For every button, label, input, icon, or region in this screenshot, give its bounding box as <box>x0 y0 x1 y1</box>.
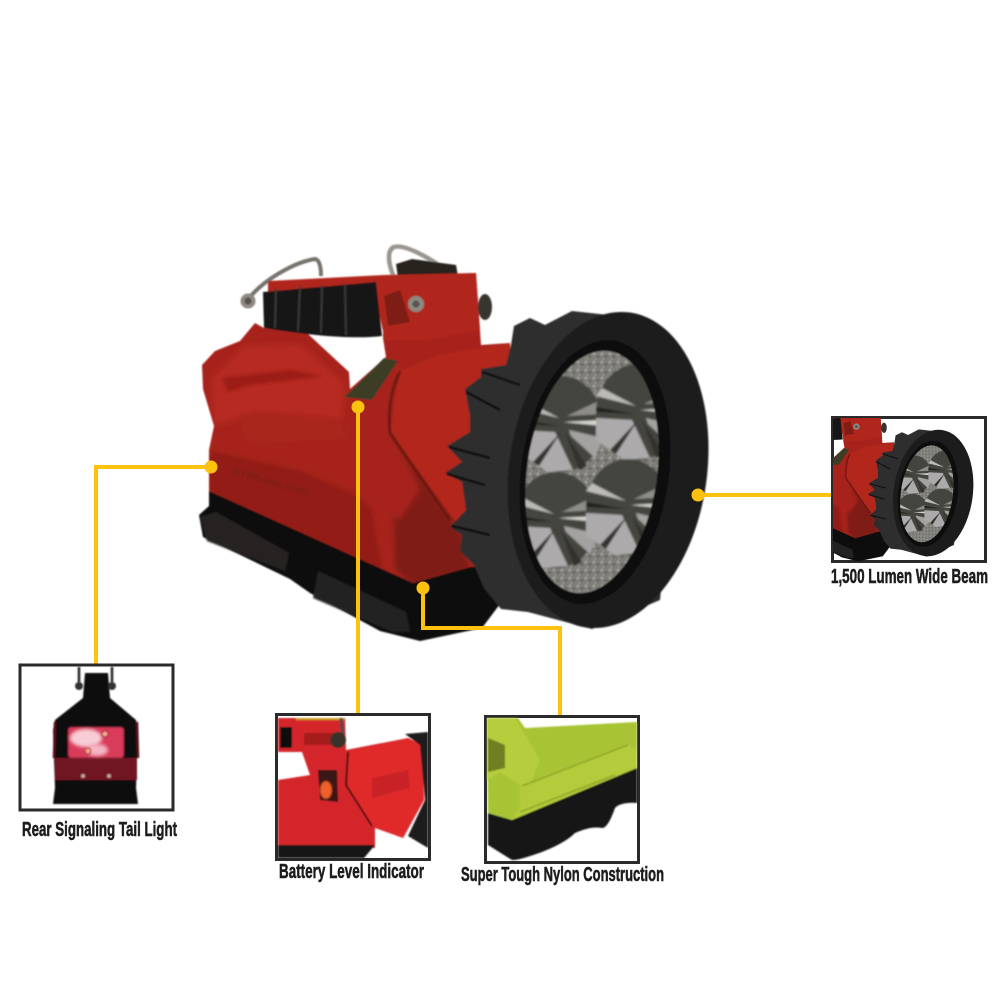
connector: battery indicator <box>352 400 364 713</box>
collar ribs <box>447 372 520 535</box>
connector: tail light <box>96 460 218 664</box>
icon: yellow-green housing close-up <box>487 718 637 860</box>
wire bails <box>247 247 447 304</box>
front bezel <box>488 299 728 641</box>
body shading: STREAMLIGHT <box>231 466 312 498</box>
label: battery level indicator: Battery Level Indicator <box>279 861 424 883</box>
callout: super tough nylon construction <box>486 716 638 862</box>
connector: wide beam <box>692 488 831 502</box>
icon: lantern side close-up <box>278 718 428 858</box>
rear black cap <box>396 259 458 278</box>
red lantern body <box>202 273 514 583</box>
label: rear signaling tail light: Rear Signaling Tail Light <box>22 819 177 841</box>
carry handle <box>263 273 480 340</box>
lens with four reflectors <box>510 340 680 610</box>
bolts <box>240 294 492 320</box>
callout: rear signaling tail light <box>20 665 173 810</box>
barrel seam <box>389 372 450 520</box>
connector: nylon construction <box>416 582 560 715</box>
inset frame <box>276 714 430 860</box>
body shading <box>209 345 470 585</box>
battery level indicator strip <box>344 358 398 400</box>
callout: battery level indicator <box>276 714 430 860</box>
knurled lens collar <box>445 311 680 629</box>
callout: 1,500 lumen wide beam <box>831 416 987 563</box>
label: super tough nylon construction: Super Tough Nylon Construction <box>461 864 664 886</box>
black base and feet <box>199 488 503 641</box>
inset frame <box>20 665 173 810</box>
icon: lantern rear view <box>53 667 138 804</box>
icon: lantern front close-up <box>833 418 974 561</box>
lantern product photo <box>199 247 728 641</box>
barrel <box>390 343 516 560</box>
inset frame <box>486 716 638 862</box>
inset frame <box>832 418 986 562</box>
